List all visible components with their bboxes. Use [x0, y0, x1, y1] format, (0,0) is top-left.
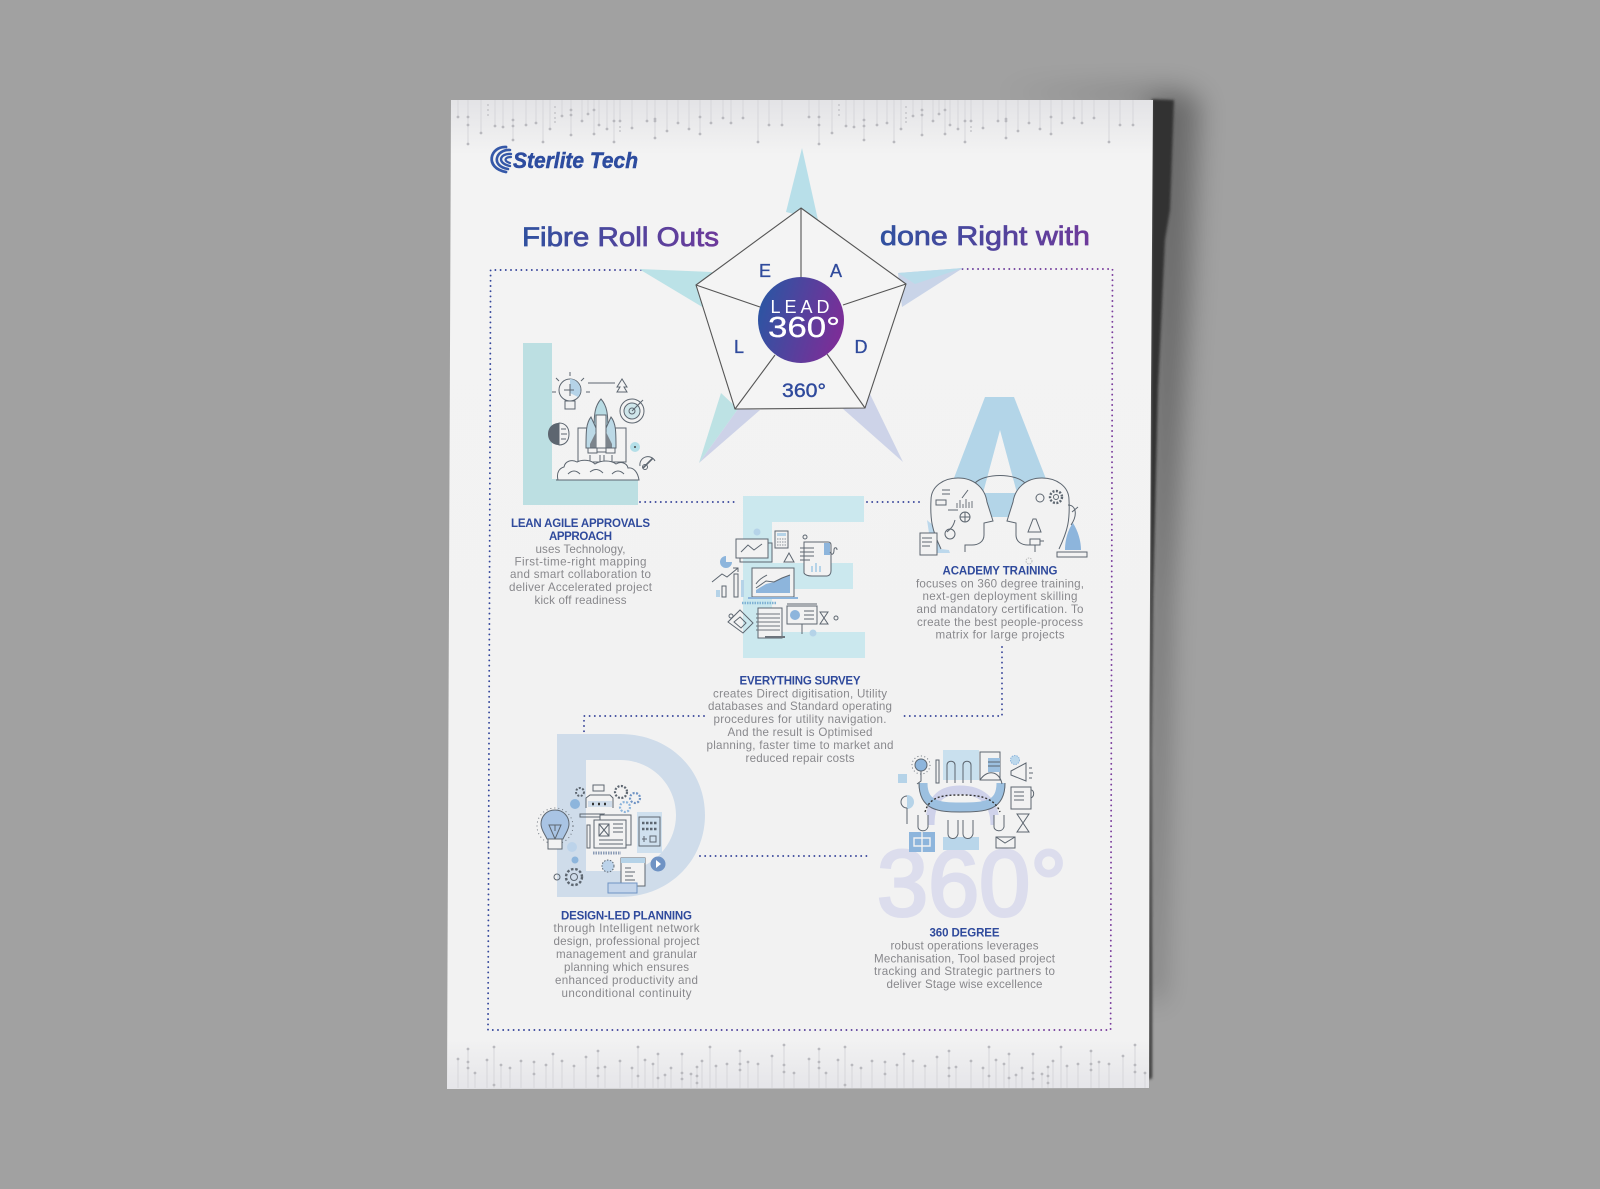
body: reduced repair costs — [746, 752, 855, 765]
connector E to D — [584, 716, 704, 733]
body: procedures for utility navigation. — [714, 713, 886, 726]
keyboard — [608, 883, 637, 893]
triangle — [784, 553, 794, 562]
gauge — [640, 457, 655, 470]
connector D to 360 — [700, 855, 867, 857]
centre badge: LEAD — [770, 297, 830, 317]
icon: two heads — [920, 476, 1087, 564]
monitor — [748, 568, 798, 598]
body: creates Direct digitisation, Utility — [713, 688, 887, 700]
body: enhanced productivity and — [555, 974, 698, 987]
brain — [548, 423, 569, 445]
circuit pattern: top — [458, 100, 1133, 144]
arrow up — [588, 379, 627, 392]
text block: design-led planning — [554, 910, 700, 1000]
segment label 360: 360° — [782, 381, 826, 402]
trend and bars — [712, 568, 744, 597]
connector A to 360 — [902, 647, 1002, 716]
centre badge: 360° — [768, 312, 840, 344]
logo: Sterlite Tech — [492, 147, 638, 173]
circuit pattern: bottom — [458, 1045, 1145, 1088]
target — [620, 399, 644, 423]
arch behind — [930, 790, 995, 825]
lower hands — [918, 815, 1004, 839]
building panel — [980, 752, 1002, 784]
text block: 360 degree — [874, 928, 1056, 991]
hourglass — [1017, 814, 1029, 832]
keyboard strip — [593, 852, 621, 854]
gears — [554, 786, 640, 885]
lower left block — [909, 832, 935, 852]
heading: LEAN AGILE APPROVALS — [511, 518, 650, 530]
segment letter D: D — [854, 337, 868, 357]
lower keyboard — [943, 837, 979, 850]
icon: rocket launch — [548, 372, 655, 480]
magnifier — [901, 795, 914, 824]
top screen — [943, 750, 979, 780]
scroll — [1011, 787, 1034, 809]
pencil — [580, 814, 604, 817]
top panel — [586, 795, 613, 808]
pen — [765, 636, 785, 638]
heading: EVERYTHING SURVEY — [740, 676, 861, 688]
small dots — [729, 528, 838, 636]
bulb — [552, 372, 590, 409]
vertical pencil — [587, 825, 590, 848]
ruler — [1057, 552, 1087, 557]
body: deliver Stage wise excellence — [886, 978, 1042, 991]
dotted stripe — [742, 602, 777, 604]
small gear — [1026, 558, 1032, 564]
rocket — [586, 399, 616, 465]
play button — [650, 856, 666, 872]
teal dot — [630, 442, 640, 452]
text block: lean agile approvals — [509, 518, 653, 607]
body: databases and Standard operating — [708, 700, 892, 713]
megaphone — [1011, 763, 1033, 781]
body: Mechanisation, Tool based project — [874, 952, 1056, 966]
heading: DESIGN-LED PLANNING — [561, 910, 692, 922]
icon: operations 360 — [898, 750, 1034, 852]
title left: Fibre Roll Outs — [522, 222, 719, 252]
phone — [637, 812, 662, 853]
body: matrix for large projects — [936, 628, 1065, 642]
body: deliver Accelerated project — [509, 581, 653, 594]
body: focuses on 360 degree training, — [916, 578, 1084, 590]
segment letter E: E — [759, 261, 771, 281]
body: First-time-right mapping — [514, 556, 646, 568]
body: unconditional continuity — [562, 987, 692, 1000]
document — [621, 858, 645, 886]
body: create the best people-process — [917, 616, 1083, 629]
paper shadow — [1000, 90, 1200, 1080]
left squares — [898, 774, 907, 783]
pencil — [936, 760, 939, 783]
hands top — [947, 761, 971, 783]
body: through Intelligent network — [554, 922, 700, 935]
blue dots — [567, 799, 614, 872]
gear dot — [1010, 756, 1020, 764]
left head — [931, 478, 993, 552]
body: management and granular — [556, 948, 697, 961]
icon: design planning — [537, 785, 666, 893]
body: kick off readiness — [534, 594, 627, 607]
icon: logo swirl — [492, 147, 511, 172]
centre badge — [758, 277, 844, 363]
icon: survey data — [712, 528, 838, 638]
heading: 360 DEGREE — [930, 928, 1000, 940]
bulb — [537, 808, 573, 849]
segment letter L: L — [734, 337, 744, 357]
document — [920, 533, 937, 555]
connector L to E — [640, 501, 735, 503]
pie — [720, 556, 732, 568]
blue U band — [923, 783, 1001, 807]
right head — [1007, 478, 1078, 552]
body: planning which ensures — [564, 961, 689, 974]
body: next-gen deployment skilling — [922, 590, 1078, 603]
body: tracking and Strategic partners to — [874, 965, 1055, 978]
blueprint — [594, 815, 631, 848]
body: robust operations leverages — [890, 940, 1039, 952]
window frame — [578, 428, 626, 462]
envelope — [996, 837, 1015, 848]
dashed arc — [925, 795, 1000, 812]
diamond — [728, 610, 753, 633]
segment letter A: A — [830, 261, 842, 281]
connecting arc — [975, 476, 1025, 483]
heading: ACADEMY TRAINING — [942, 566, 1058, 578]
body: and mandatory certification. To — [916, 603, 1084, 616]
title right: done Right with — [880, 221, 1090, 251]
hourglass — [820, 612, 828, 624]
scroll — [800, 542, 837, 576]
big letter L — [523, 343, 638, 505]
big letter E — [743, 496, 865, 658]
star arms — [639, 148, 963, 463]
body: planning, faster time to market and — [706, 739, 894, 752]
body: and smart collaboration to — [510, 568, 651, 581]
connector E to A — [867, 501, 923, 503]
body: design, professional project — [554, 935, 700, 948]
document — [756, 608, 782, 638]
big 360 degree: 360° — [877, 830, 1067, 936]
chart frame — [736, 539, 772, 562]
board — [787, 604, 817, 634]
bulb — [912, 756, 930, 784]
dotted frame — [488, 269, 1112, 1030]
body: And the result is Optimised — [728, 726, 872, 739]
calculator — [775, 531, 788, 548]
top rectangle — [593, 785, 604, 791]
left blue splash — [927, 520, 950, 553]
right blue splash — [1065, 523, 1081, 550]
logo wordmark: Sterlite Tech — [513, 148, 638, 173]
text block: everything survey — [706, 676, 894, 765]
paper sheet — [447, 100, 1153, 1089]
pentagon diagram — [696, 208, 906, 409]
heading: APPROACH — [549, 531, 612, 543]
big letter A — [936, 397, 1064, 525]
text block: academy training — [916, 566, 1084, 642]
body: uses Technology, — [536, 543, 626, 556]
big letter D — [557, 734, 705, 897]
smoke clouds — [556, 460, 639, 480]
